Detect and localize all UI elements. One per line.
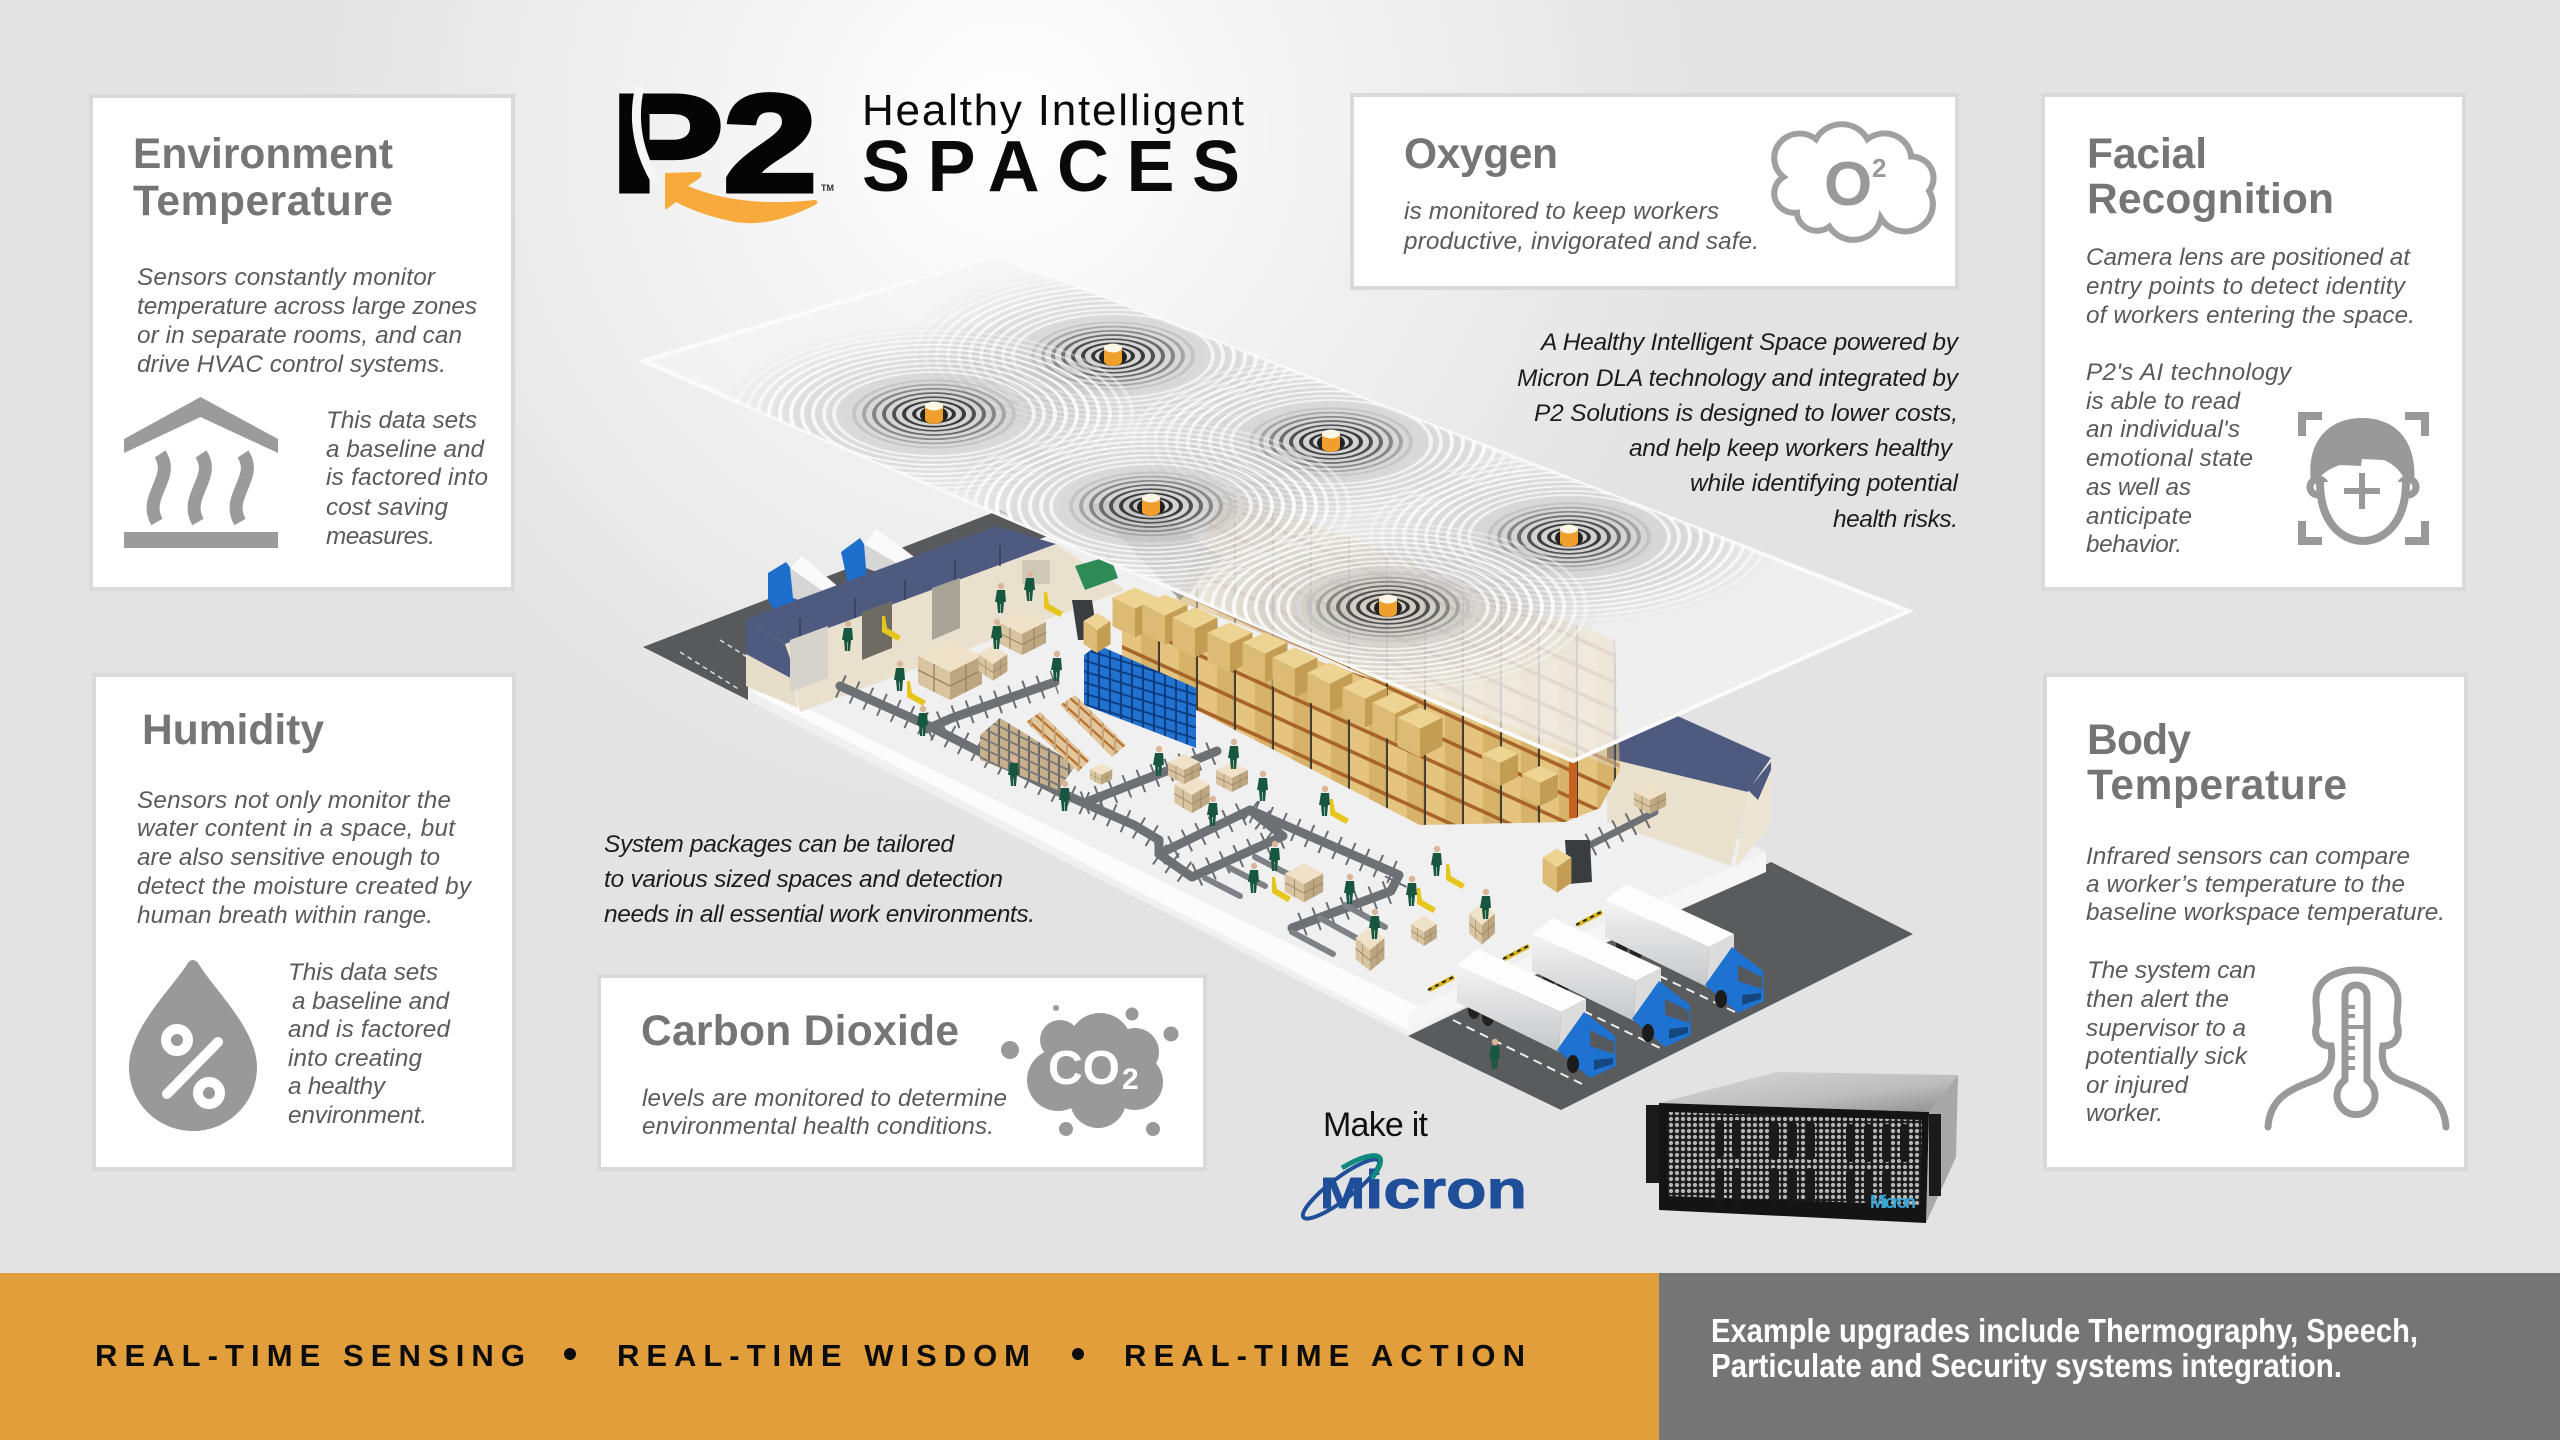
panel: carbon dioxide — [599, 976, 1205, 1169]
text: body temperature description: a worker’s temperature to the — [2086, 871, 2405, 898]
sensors — [920, 344, 1583, 617]
icon: face scan — [2302, 416, 2425, 541]
text: alert note: potentially sick — [2085, 1043, 2249, 1070]
back wall with roof — [746, 526, 1125, 712]
text: carbon dioxide description — [642, 1085, 1007, 1140]
text: alert note: then alert the — [2086, 986, 2229, 1013]
text: AI technology note: P2's AI technology — [2086, 359, 2293, 386]
title: SPACES — [862, 127, 1240, 207]
text: body temperature description: Infrared sensors can compare — [2086, 843, 2410, 870]
icon: oxygen cloud — [1774, 124, 1934, 240]
text: temperature baseline note: cost saving — [326, 494, 448, 521]
right wall — [1607, 714, 1771, 868]
panel: humidity — [94, 675, 514, 1169]
text: healthy intelligent space summary — [1517, 329, 1960, 533]
icon: heat rising under roof — [124, 397, 278, 548]
banner: real-time strip: REAL-TIME ACTION — [1124, 1338, 1525, 1373]
text: body temperature description — [2086, 843, 2445, 926]
text: system packages note: to various sized spaces and detection — [604, 866, 1003, 893]
text: make it: Make it — [1323, 1106, 1429, 1144]
parked trucks behind wall — [768, 528, 918, 612]
text: humidity description: are also sensitive enough to — [137, 844, 440, 871]
text: humidity baseline note — [288, 959, 451, 1129]
text: oxygen description: productive, invigorated and safe. — [1403, 228, 1759, 255]
text: temperature description: temperature across large zones — [137, 293, 477, 320]
panel: environment temperature — [91, 96, 513, 589]
text: alert note: The system can — [2087, 957, 2256, 984]
icon: oxygen cloud: 2 — [1872, 153, 1886, 183]
panel: oxygen — [1352, 95, 1957, 288]
conveyors — [840, 682, 1655, 954]
delivery trucks — [1428, 884, 1764, 1078]
text: humidity baseline note: This data sets — [288, 959, 438, 986]
text: humidity baseline note: into creating — [288, 1045, 422, 1072]
text: alert note: worker. — [2086, 1100, 2163, 1127]
text: temperature description — [137, 264, 477, 378]
blue automated rack — [1084, 645, 1196, 748]
banner: example upgrades — [1659, 1273, 2560, 1440]
text: alert note: or injured — [2086, 1072, 2189, 1099]
banner: real-time strip: REAL-TIME WISDOM — [617, 1338, 1030, 1373]
text: AI technology note: behavior. — [2086, 531, 2182, 558]
text: body temperature description: baseline workspace temperature. — [2086, 899, 2445, 926]
workers — [842, 571, 1500, 1069]
text: carbon dioxide description: environmental health conditions. — [642, 1113, 994, 1140]
text: humidity baseline note: a healthy — [288, 1073, 387, 1100]
text: system packages note — [604, 831, 1035, 928]
text: healthy intelligent space summary: health risks. — [1833, 506, 1958, 533]
text: humidity description: Sensors not only monitor the — [137, 787, 451, 814]
icon: head with thermometer — [2268, 970, 2446, 1127]
logo: P2: P2 — [611, 67, 817, 221]
text: AI technology note: anticipate — [2086, 503, 2192, 530]
sensor plane with ripples — [643, 256, 1909, 761]
heading: facial recognition — [2087, 131, 2334, 223]
text: AI technology note — [2086, 359, 2293, 558]
text: humidity description: water content in a space, but — [137, 815, 456, 842]
text: healthy intelligent space summary: A Healthy Intelligent Space powered by — [1539, 329, 1960, 356]
heading: facial recognition: Facial — [2087, 131, 2207, 178]
text: facial recognition description: Camera lens are positioned at — [2086, 244, 2411, 271]
text: facial recognition description — [2086, 244, 2415, 329]
text: temperature description: or in separate rooms, and can — [137, 322, 462, 349]
banner: real-time strip — [0, 1273, 1659, 1440]
text: AI technology note: as well as — [2086, 474, 2191, 501]
panel: body temperature — [2045, 675, 2466, 1169]
icon: CO2 cloud: 2 — [1122, 1063, 1139, 1096]
text: carbon dioxide description: levels are monitored to determine — [642, 1085, 1007, 1112]
text: facial recognition description: of workers entering the space. — [2086, 302, 2415, 329]
text: humidity baseline note: environment. — [288, 1102, 427, 1129]
text: AI technology note: an individual's — [2086, 416, 2240, 443]
text: alert note: supervisor to a — [2086, 1015, 2246, 1042]
building floor — [748, 680, 1408, 1036]
forklifts and pallet trucks — [882, 592, 1592, 913]
text: humidity description: detect the moisture created by — [137, 873, 473, 900]
heading: oxygen: Oxygen — [1404, 131, 1558, 178]
logo: P2: TM — [821, 183, 834, 193]
text: temperature baseline note — [326, 407, 488, 550]
panel: facial recognition — [2043, 95, 2464, 589]
illustration: warehouse cutaway — [643, 490, 1913, 1110]
text: AI technology note: is able to read — [2086, 388, 2241, 415]
text: facial recognition description: entry points to detect identity — [2086, 273, 2407, 300]
wire shelves with stock — [980, 695, 1126, 790]
text: AI technology note: emotional state — [2086, 445, 2253, 472]
storage racks — [1090, 490, 1620, 825]
heading: environment temperature — [133, 131, 393, 225]
icon: CO2 cloud: CO — [1048, 1042, 1120, 1095]
heading: environment temperature: Temperature — [133, 178, 393, 225]
text: oxygen description — [1403, 198, 1759, 255]
icon: orange arrow — [665, 172, 818, 223]
text: system packages note: System packages can be tailored — [604, 831, 955, 858]
text: temperature description: drive HVAC control systems. — [137, 351, 446, 378]
title: Healthy Intelligent — [862, 86, 1244, 135]
text: temperature description: Sensors constantly monitor — [137, 264, 436, 291]
text: temperature baseline note: This data sets — [326, 407, 477, 434]
text: humidity description: human breath within range. — [137, 902, 433, 929]
heading: body temperature: Body — [2087, 717, 2191, 764]
pallets — [918, 610, 1666, 971]
icon: CO2 cloud — [1001, 1005, 1178, 1136]
banner: example upgrades: Particulate and Security systems integration. — [1711, 1347, 2342, 1384]
text: humidity baseline note: a baseline and — [292, 988, 450, 1015]
logo: Micron — [1297, 1152, 1527, 1226]
text: temperature baseline note: is factored into — [326, 464, 488, 491]
heading: humidity: Humidity — [142, 707, 324, 754]
banner: example upgrades: Example upgrades include Thermography, Speech, — [1711, 1312, 2418, 1349]
title — [862, 86, 1244, 207]
icon: oxygen cloud: O — [1824, 150, 1872, 219]
text: humidity description — [137, 787, 473, 929]
text: healthy intelligent space summary: and help keep workers healthy — [1629, 435, 1954, 462]
text: temperature baseline note: a baseline and — [326, 436, 485, 463]
heading: facial recognition: Recognition — [2087, 176, 2334, 223]
server hardware: Micron — [1870, 1192, 1916, 1212]
heading: body temperature: Temperature — [2087, 762, 2347, 809]
text: humidity baseline note: and is factored — [288, 1016, 451, 1043]
text: alert note — [2085, 957, 2256, 1127]
text: healthy intelligent space summary: P2 Solutions is designed to lower costs, — [1534, 400, 1958, 427]
logo: Micron: Micron — [1320, 1160, 1527, 1220]
text: healthy intelligent space summary: Micron DLA technology and integrated by — [1517, 365, 1960, 392]
icon: water drop percent — [129, 960, 257, 1131]
heading: environment temperature: Environment — [133, 131, 393, 178]
heading: body temperature — [2087, 717, 2347, 809]
server hardware — [1646, 1072, 1958, 1223]
text: healthy intelligent space summary: while identifying potential — [1690, 470, 1959, 497]
text: temperature baseline note: measures. — [326, 523, 435, 550]
text: system packages note: needs in all essential work environments. — [604, 901, 1035, 928]
heading: carbon dioxide: Carbon Dioxide — [641, 1008, 959, 1055]
banner: real-time strip: REAL-TIME SENSING — [95, 1338, 525, 1373]
text: oxygen description: is monitored to keep workers — [1404, 198, 1719, 225]
